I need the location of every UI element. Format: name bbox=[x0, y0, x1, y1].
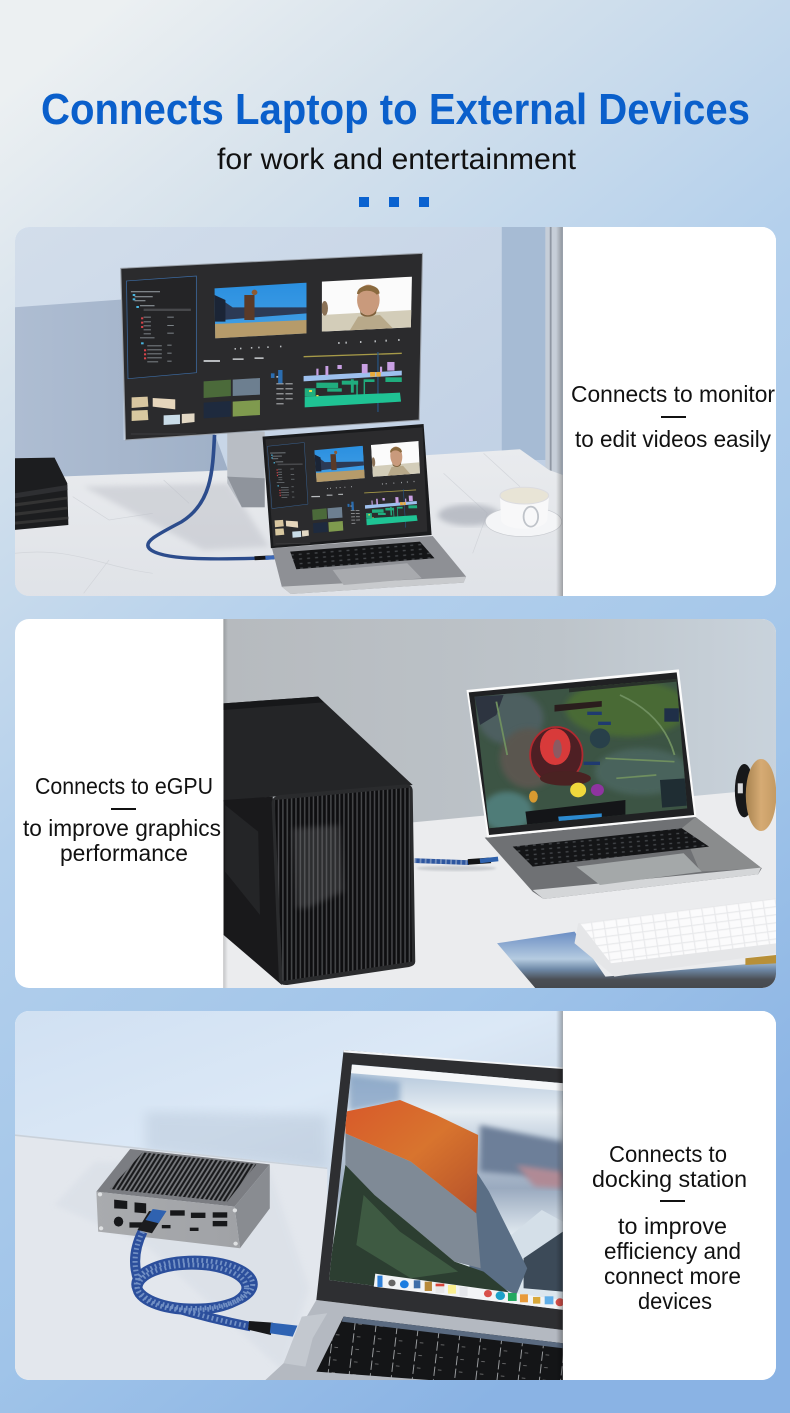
mouse pad bbox=[497, 932, 776, 988]
photo edge shadow bbox=[557, 227, 563, 596]
cable plug toward laptop bbox=[248, 1321, 297, 1337]
panel: docking station bbox=[0, 1005, 776, 1390]
decorative blue squares bbox=[359, 197, 429, 207]
white keyboard bbox=[575, 898, 776, 977]
photo: laptop connected to monitor bbox=[0, 220, 563, 605]
cable plug at dock bbox=[137, 1209, 167, 1233]
ports bbox=[114, 1200, 227, 1231]
black box stack bbox=[15, 458, 68, 530]
caption: eGPU: Connects to eGPU bbox=[35, 773, 213, 799]
caption: eGPU: to improve graphics bbox=[23, 815, 221, 841]
dock icons bbox=[374, 1274, 564, 1310]
coffee cup bbox=[485, 487, 562, 537]
subtitle: for work and entertainment bbox=[217, 143, 577, 176]
white caption background bbox=[15, 619, 776, 988]
caption: monitor bbox=[571, 381, 775, 452]
caption: docking station: connect more bbox=[604, 1263, 741, 1289]
white caption background bbox=[15, 1011, 776, 1380]
headphones bbox=[735, 759, 776, 831]
white caption background bbox=[562, 227, 776, 596]
panel: eGPU bbox=[15, 615, 780, 1000]
blue cable bbox=[148, 435, 275, 559]
caption: docking station: devices bbox=[638, 1288, 712, 1314]
photo edge shadow bbox=[223, 619, 227, 988]
caption: docking station bbox=[592, 1141, 747, 1314]
caption: docking station: docking station bbox=[592, 1166, 747, 1192]
monitor bbox=[121, 253, 423, 440]
braided cable coil bbox=[135, 1232, 253, 1327]
caption: docking station: efficiency and bbox=[604, 1238, 741, 1264]
caption: eGPU: performance bbox=[60, 840, 188, 866]
laptop bbox=[255, 1050, 564, 1390]
laptop bbox=[263, 424, 466, 594]
photo: laptop connected to docking station bbox=[0, 1005, 564, 1390]
caption: docking station: to improve bbox=[618, 1213, 727, 1239]
eGPU enclosure bbox=[224, 697, 415, 985]
panel: monitor bbox=[0, 220, 776, 605]
caption: docking station: Connects to bbox=[609, 1141, 727, 1167]
photo: laptop connected to eGPU bbox=[224, 615, 780, 1000]
docking station bbox=[96, 1149, 270, 1248]
photo edge shadow bbox=[557, 1011, 563, 1380]
braided cable bbox=[415, 859, 498, 863]
laptop bbox=[467, 669, 762, 899]
game screen bbox=[475, 678, 689, 832]
monitor stand bbox=[227, 432, 265, 507]
desktop wallpaper bbox=[327, 1062, 564, 1315]
caption: monitor: to edit videos easily bbox=[575, 426, 771, 452]
caption: eGPU bbox=[23, 773, 221, 866]
caption: monitor: Connects to monitor bbox=[571, 381, 775, 407]
